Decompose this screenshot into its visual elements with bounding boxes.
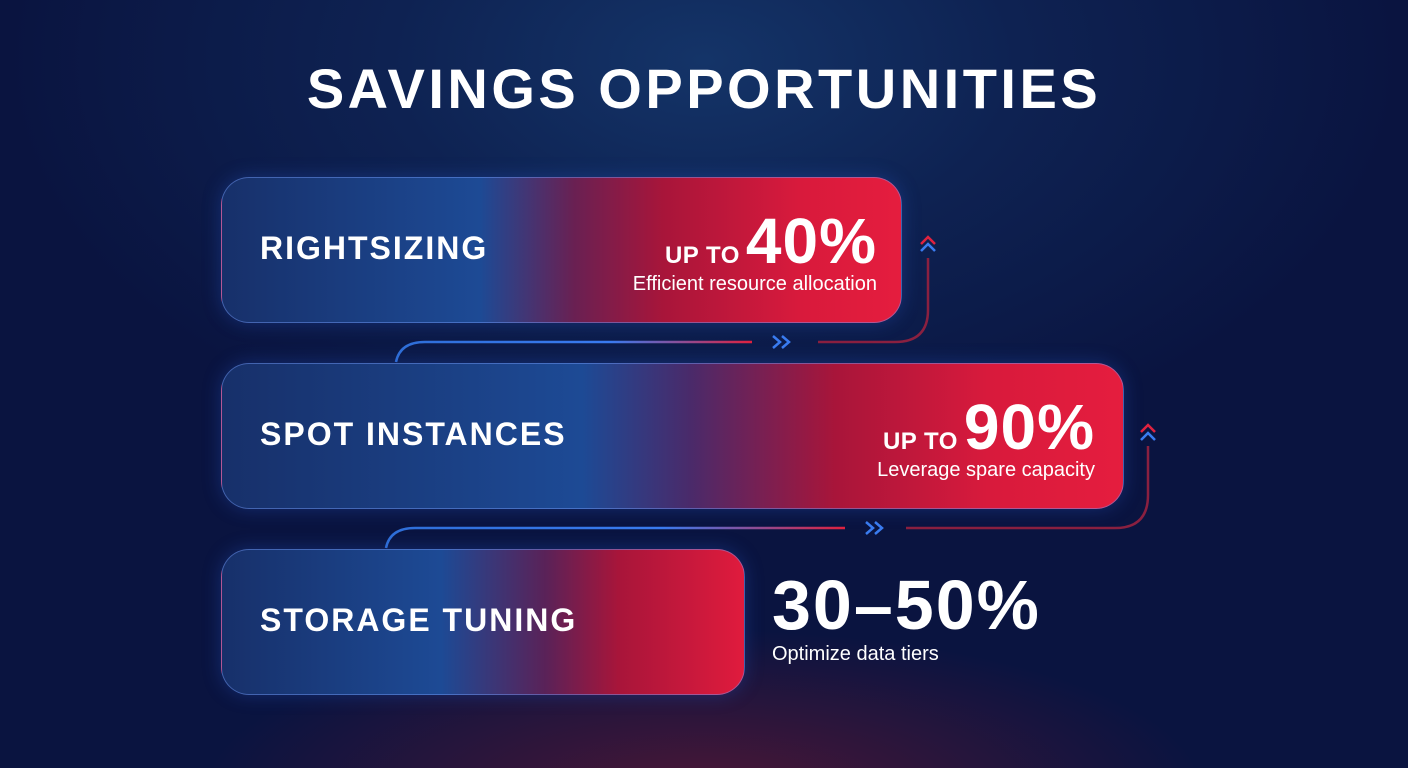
value: up to 90%: UP TO90% xyxy=(883,391,1095,463)
value: up to 40%: UP TO40% xyxy=(665,205,877,277)
value: up to 40%: Efficient resource allocation xyxy=(633,273,877,295)
label: storage tuning: STORAGE TUNING xyxy=(260,602,577,638)
panel: storage tuning xyxy=(221,549,745,695)
panel: spot instances xyxy=(221,363,1124,509)
value: up to 40% xyxy=(633,205,877,295)
label: spot instances: SPOT INSTANCES xyxy=(260,416,567,452)
label: rightsizing: RIGHTSIZING xyxy=(260,230,488,266)
value: 30-50%: Optimize data tiers xyxy=(772,643,939,665)
title: SAVINGS OPPORTUNITIES xyxy=(307,57,1101,120)
panel: rightsizing xyxy=(221,177,902,323)
value: up to 90%: Leverage spare capacity xyxy=(877,459,1095,481)
value: 30-50%: 30–50% xyxy=(772,566,1041,644)
